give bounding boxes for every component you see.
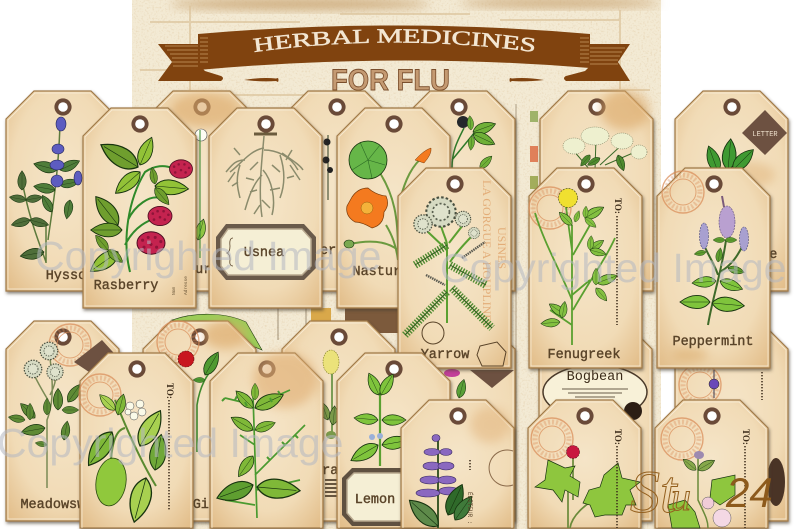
tag: back lower 2 (143, 321, 256, 521)
plant: usnea lichen (226, 134, 303, 217)
plant: strawberry (535, 446, 640, 528)
tag: strawberry (528, 400, 641, 528)
lemon label: Lemon (355, 493, 395, 508)
bogbean oval label: Bogbean (567, 370, 623, 385)
stamp ring (489, 450, 513, 486)
banner heading: HERBAL MEDICINES (252, 29, 534, 52)
label: Burdock (187, 263, 244, 278)
tag: rasberry (83, 108, 196, 308)
diamond stamp (470, 370, 514, 388)
signature: St (630, 459, 678, 525)
label: Meadowsweet (20, 498, 110, 513)
stain (170, 92, 240, 128)
signature: u (671, 474, 691, 519)
label: Yarrow (421, 348, 469, 363)
tag: lemon balm (337, 353, 450, 528)
stain (470, 407, 510, 443)
tag: back 5 (540, 90, 653, 291)
tag: sage (401, 400, 514, 529)
subtitle: for flu: FOR FLU (331, 64, 450, 97)
plant: hyssop (9, 117, 82, 263)
tag: usnea (209, 108, 322, 308)
stain (600, 90, 650, 130)
to lines: Adresse (183, 276, 189, 295)
plant: meadowsweet (8, 342, 84, 488)
plant: rasberry (86, 135, 192, 277)
to line: TO: (613, 198, 623, 214)
watermark: copyrighted image (0, 233, 786, 466)
stamp (661, 418, 703, 460)
background text: USINES (495, 227, 509, 269)
to line: TO: (741, 429, 751, 445)
tag: back lower 3 (282, 321, 395, 521)
stamps (422, 322, 506, 366)
plant: lime (81, 391, 169, 525)
berries plant (322, 135, 333, 200)
text block (325, 480, 337, 496)
tag: back 2 (145, 91, 258, 291)
to lines (171, 276, 189, 295)
small text: ÉDITEUR : (466, 492, 473, 524)
tag: back 6 (675, 91, 788, 291)
plant: yellow flower (317, 350, 339, 439)
bogbean oval label (543, 365, 647, 419)
label: Peppermint (672, 335, 754, 350)
plant: mallow (668, 451, 735, 528)
plant: lemon balm (348, 371, 411, 467)
stain (203, 321, 247, 349)
stamp (157, 321, 199, 363)
to lines: Nom (171, 287, 177, 295)
plant: yarrow (405, 197, 492, 335)
to line (165, 383, 175, 510)
tag: yarrow (398, 168, 511, 368)
signature (630, 459, 773, 525)
flower and leaf bits (193, 129, 208, 258)
poster background (132, 0, 661, 529)
tag: back 4 (402, 91, 515, 291)
tag: herb with flower sprigs (210, 352, 323, 528)
label: Nasturtium (352, 265, 434, 280)
to line: TO: (165, 383, 175, 399)
tag: bogbean (539, 321, 652, 521)
tag: back 3 (280, 91, 393, 291)
letter stamp (742, 110, 787, 155)
stamp (79, 374, 121, 416)
stamp (662, 171, 704, 213)
tag: meadowsweet (6, 321, 122, 521)
label: Hyssop (46, 269, 94, 284)
watermark: copyrighted image: Copyrighted Image (0, 420, 343, 466)
background text: LA GORGUE A HOUPLINES (480, 180, 494, 328)
stamp (531, 418, 573, 460)
stamp (679, 364, 721, 406)
tag: lime (79, 353, 193, 528)
label: Elder (296, 244, 336, 259)
purple flower (709, 370, 719, 398)
tag: mallow (655, 400, 768, 528)
to line: TO: (613, 429, 623, 445)
to line (469, 460, 471, 470)
plant: fenugreek (535, 188, 619, 345)
stamp (49, 324, 91, 366)
usnea label: Usnea (244, 246, 284, 261)
plant: peppermint (680, 196, 748, 325)
label: Rasberry (94, 279, 158, 294)
magenta flower (444, 369, 460, 377)
tag: fenugreek (529, 168, 642, 368)
watermark: copyrighted image: Copyrighted Image (35, 233, 381, 279)
plant: sage (404, 434, 477, 529)
ring ornament (624, 402, 642, 420)
diamond stamp (74, 340, 122, 378)
plant: herb (214, 383, 305, 518)
signature: 24 (725, 469, 773, 516)
tag: hyssop (back) (6, 91, 119, 291)
plant (452, 115, 497, 171)
stain (253, 352, 317, 408)
letter stamp: LETTER (752, 131, 778, 139)
watermark: copyrighted image: Copyrighted Image (440, 245, 786, 291)
label: Fenugreek (548, 348, 620, 363)
to dots (761, 372, 763, 400)
ring ornament (767, 458, 785, 506)
usnea label (216, 224, 316, 280)
tag: back lower right (675, 321, 788, 521)
label: Licorice (713, 248, 777, 263)
lemon label (342, 468, 450, 526)
ornaments (244, 78, 544, 82)
title banner (158, 26, 630, 81)
tag: back lower 4 (402, 321, 515, 521)
plant: umbels (563, 127, 647, 172)
plant: red berry stem (178, 349, 223, 452)
tag: nasturtium (337, 108, 450, 308)
to line (613, 198, 623, 325)
background text (480, 180, 509, 328)
leaf (455, 378, 468, 399)
stamp (529, 187, 571, 229)
label: Ephedra (282, 464, 338, 479)
label: Ginger (193, 498, 241, 513)
stain (715, 161, 775, 189)
stain (672, 348, 708, 362)
plant: nasturtium (344, 141, 431, 260)
plant: leaves (703, 138, 758, 174)
tag: peppermint (657, 168, 770, 368)
